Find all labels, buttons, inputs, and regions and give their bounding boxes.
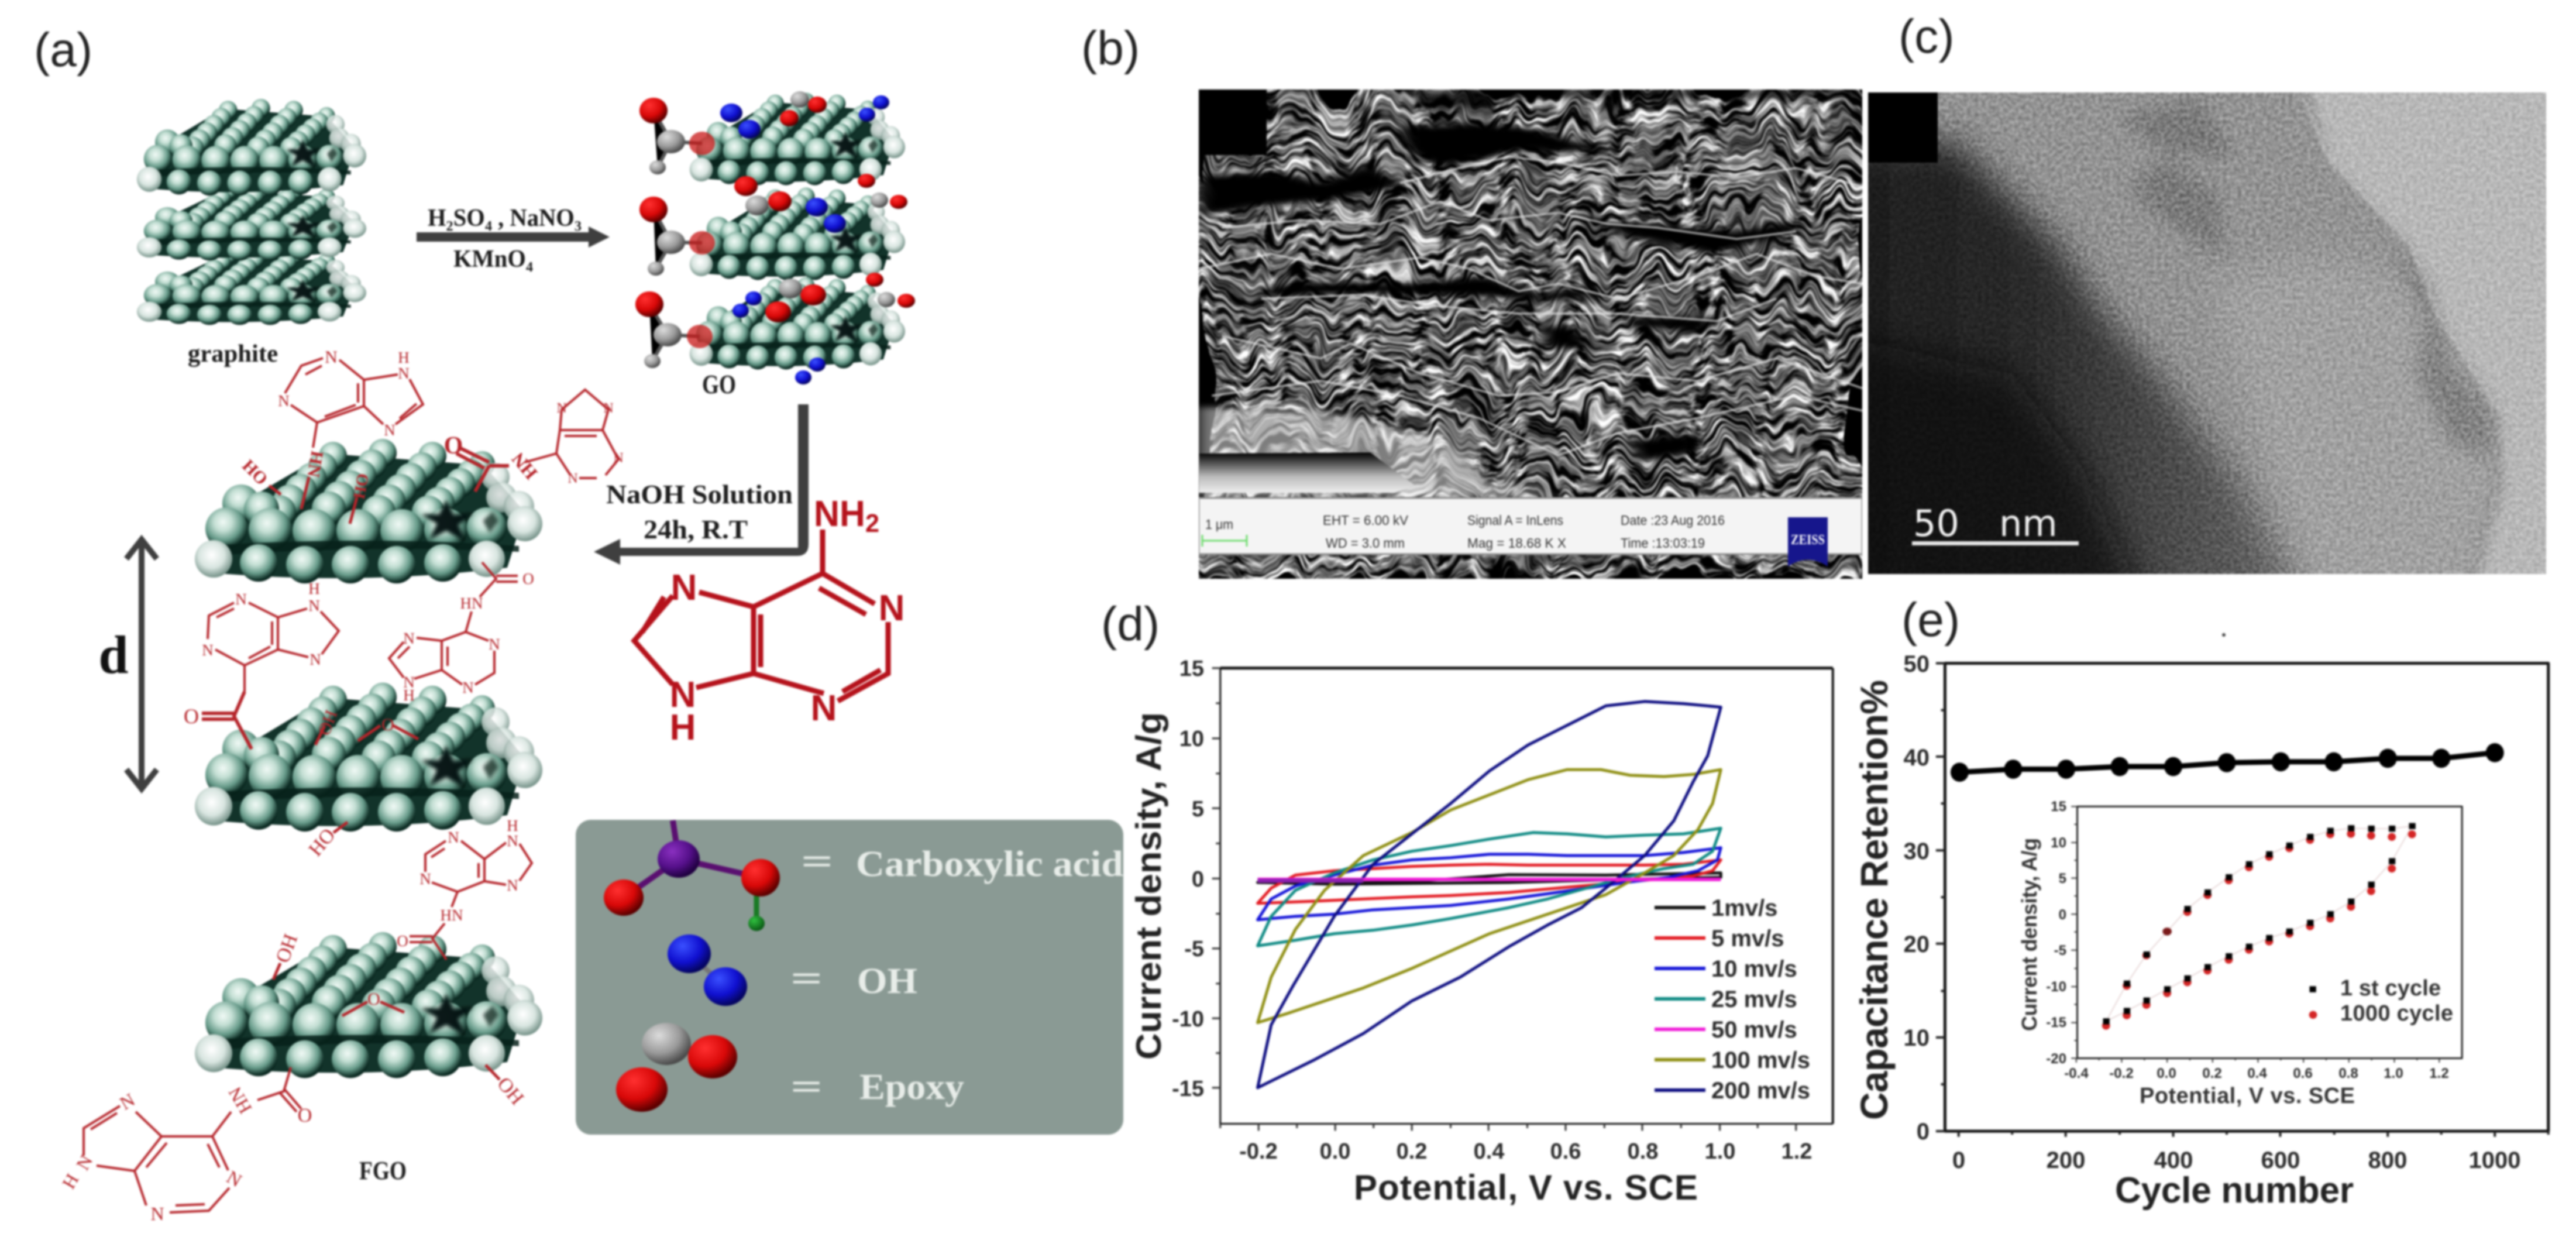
top adenine and functional groups: N <box>384 421 395 439</box>
OH ball-and-stick icon <box>668 935 747 1006</box>
time and temperature conditions: 24h, R.T <box>644 514 748 544</box>
SEM info bar: 1 μm <box>1205 517 1233 532</box>
x tick labels <box>1239 1139 1812 1164</box>
x tick labels: 1000 <box>2469 1148 2520 1173</box>
large adenine molecule: NH <box>814 494 866 534</box>
x tick labels: 200 <box>2047 1148 2085 1173</box>
x tick labels: 0.6 <box>1550 1139 1581 1164</box>
inset x tick labels: -0.2 <box>2109 1066 2134 1081</box>
inset y tick labels <box>2046 799 2066 1067</box>
x tick labels: -0.2 <box>1239 1139 1278 1164</box>
y tick labels: -10 <box>1172 1007 1204 1032</box>
large adenine molecule: N <box>879 588 904 628</box>
distance arrow d <box>126 540 157 789</box>
adenine bottom left: HN <box>224 1083 256 1118</box>
FGO top sheet <box>195 439 542 583</box>
y axis title: Capacitance Retention% <box>1852 680 1896 1120</box>
TEM scale label: 50 <box>1913 502 1959 545</box>
SEM info bar: WD = 3.0 mm <box>1326 535 1405 551</box>
panel c: TEM micrograph <box>1802 59 2546 620</box>
functional groups on middle sheet <box>305 707 418 860</box>
ZEISS logo: ZEISS <box>1791 532 1825 548</box>
SEM info bar: Time :13:03:19 <box>1621 535 1705 551</box>
OH label: OH <box>857 961 917 1001</box>
adenine left between top and middle sheet: N <box>309 651 321 668</box>
panel a: synthesis scheme <box>58 91 1123 1224</box>
y tick labels <box>1172 657 1204 1101</box>
TEM dark thick region <box>1802 140 2311 620</box>
TEM scale label: nm <box>1999 502 2058 545</box>
large adenine molecule <box>634 494 904 748</box>
adenine left between top and middle sheet <box>184 580 339 749</box>
adenine left between top and middle sheet: N <box>308 597 320 614</box>
adenine between middle and bottom sheet: N <box>507 877 518 894</box>
chart legend: 10 mv/s <box>1711 956 1797 982</box>
carboxylic acid equals sign: = <box>801 842 833 882</box>
functional groups on middle sheet: OH <box>315 707 341 738</box>
panel d: CV chart <box>1129 657 1833 1207</box>
panel label (e): (e) <box>1901 593 1960 647</box>
TEM fold shadows <box>2118 99 2492 456</box>
inset x tick labels: 0.0 <box>2157 1066 2176 1081</box>
inset x tick labels: 0.4 <box>2247 1066 2267 1081</box>
y tick labels: 10 <box>1179 727 1204 751</box>
CV curves <box>1258 702 1721 1088</box>
adenine bottom left: O <box>298 1105 312 1126</box>
inset x axis title: Potential, V vs. SCE <box>2140 1084 2355 1108</box>
FGO bottom sheet <box>195 932 542 1078</box>
x tick labels: 1.2 <box>1781 1139 1812 1164</box>
y tick labels: -15 <box>1172 1077 1204 1101</box>
x tick labels <box>1952 1148 2520 1173</box>
functional groups on bottom sheet: OH <box>493 1073 528 1109</box>
adenine between middle and bottom sheet: H <box>507 817 518 834</box>
y tick labels: 50 <box>1904 651 1930 677</box>
SEM info bar: Signal A = InLens <box>1467 513 1563 528</box>
top adenine and functional groups: N <box>398 365 410 382</box>
y tick labels: 0 <box>1192 867 1204 892</box>
large adenine molecule: N <box>670 675 696 715</box>
y tick labels: 30 <box>1904 839 1930 864</box>
top adenine and functional groups: N <box>568 471 578 486</box>
top adenine and functional groups: N <box>603 401 614 416</box>
functional groups on bottom sheet: OH <box>272 931 302 966</box>
top adenine and functional groups: H <box>398 349 410 366</box>
TEM lighter lower band <box>2212 257 2498 620</box>
legend panel <box>576 820 1123 1135</box>
adenine between middle and bottom sheet: HN <box>440 906 463 924</box>
y tick labels <box>1904 651 1930 1145</box>
top adenine and functional groups: N <box>613 451 624 466</box>
top adenine and functional groups: OH <box>349 472 372 500</box>
ZEISS logo <box>1788 517 1828 566</box>
adenine between middle and bottom sheet: N <box>419 870 431 888</box>
x tick labels: 0.0 <box>1320 1139 1350 1164</box>
y tick labels: 20 <box>1904 932 1930 957</box>
label GO: GO <box>702 369 736 399</box>
functional groups on bottom sheet: O <box>367 990 380 1009</box>
graphite stack <box>137 99 366 325</box>
chart legend: 5 mv/s <box>1711 926 1784 951</box>
chart legend: 100 mv/s <box>1711 1047 1810 1073</box>
adenine bottom left: H <box>58 1170 82 1193</box>
adenine bottom left: N <box>116 1089 139 1114</box>
adenine left between top and middle sheet: H <box>308 580 320 597</box>
large adenine molecule: N <box>671 568 697 608</box>
adenine left between top and middle sheet: N <box>235 590 247 608</box>
x tick labels: 800 <box>2368 1148 2407 1173</box>
reaction arrow: oxidation <box>417 226 610 248</box>
carboxylic acid ball-and-stick icon <box>604 820 780 931</box>
chart legend: 200 mv/s <box>1711 1078 1810 1104</box>
large adenine molecule: H <box>670 707 696 748</box>
SEM info bar <box>1199 498 1862 554</box>
inset axes and ticks <box>2071 806 2462 1063</box>
linker amide between top and middle sheet with adenine right: O <box>522 570 534 588</box>
inset y tick labels: -20 <box>2046 1051 2066 1067</box>
linker amide between top and middle sheet with adenine right <box>389 562 534 704</box>
label d: d <box>98 625 129 685</box>
TEM grain noise <box>1868 92 2546 574</box>
reagents above arrow: H₂SO₄ , NaNO₃ <box>428 205 582 232</box>
GO stack <box>635 91 915 384</box>
TEM darkest core <box>1802 328 2153 620</box>
inset chart <box>2017 799 2462 1108</box>
x tick labels: 0.4 <box>1474 1139 1504 1164</box>
large adenine molecule: N <box>811 688 837 729</box>
inset y tick labels: 5 <box>2059 871 2066 887</box>
SEM info bar: EHT = 6.00 kV <box>1323 513 1409 528</box>
retention data series <box>1951 743 2504 782</box>
SEM redaction block <box>1199 90 1267 155</box>
inset y tick labels: 0 <box>2059 907 2066 923</box>
panel e: capacitance retention chart <box>1852 651 2549 1211</box>
chart legend <box>1655 895 1810 1104</box>
chart legend: 25 mv/s <box>1711 987 1797 1012</box>
inset x tick labels <box>2064 1066 2449 1081</box>
linker amide between top and middle sheet with adenine right: N <box>489 635 500 653</box>
linker amide between top and middle sheet with adenine right: N <box>403 674 415 691</box>
linker amide between top and middle sheet with adenine right: N <box>462 679 474 696</box>
top adenine and functional groups: HO <box>238 456 271 489</box>
SEM lamellar texture <box>1199 90 1862 579</box>
reagent below arrow: KMnO₄ <box>453 246 533 273</box>
SEM dark crevices and ridges <box>1199 90 1862 497</box>
TEM scale bar <box>1912 541 2079 545</box>
panel label (a): (a) <box>34 23 92 77</box>
chart legend: 50 mv/s <box>1711 1017 1797 1043</box>
inset y tick labels: -15 <box>2046 1015 2066 1030</box>
x tick labels: 1.0 <box>1705 1139 1735 1164</box>
y tick labels: 40 <box>1904 745 1930 771</box>
x axis title: Potential, V vs. SCE <box>1354 1168 1698 1207</box>
y tick labels: -5 <box>1184 937 1204 961</box>
top adenine and functional groups: O <box>444 432 463 459</box>
inset x tick labels: 1.0 <box>2384 1066 2403 1081</box>
adenine between middle and bottom sheet: N <box>507 832 518 850</box>
inset x tick labels: -0.4 <box>2064 1066 2089 1081</box>
inset data points <box>2102 823 2416 1030</box>
linker amide between top and middle sheet with adenine right: HN <box>460 595 483 612</box>
functionalization arrow <box>594 404 809 565</box>
inset x tick labels: 1.2 <box>2429 1066 2449 1081</box>
inset x tick labels: 0.2 <box>2202 1066 2222 1081</box>
axes frame and ticks <box>1936 664 2549 1137</box>
adenine between middle and bottom sheet: N <box>448 829 459 846</box>
inset legend text 1000 cycle: 1000 cycle <box>2340 1001 2453 1026</box>
y tick labels: 10 <box>1904 1025 1930 1051</box>
top adenine and functional groups: N <box>278 392 290 410</box>
y axis title: Current density, A/g <box>1129 712 1168 1060</box>
top adenine and functional groups: HN <box>303 449 327 479</box>
adenine between middle and bottom sheet <box>397 817 532 960</box>
top adenine and functional groups <box>238 348 624 524</box>
SEM info bar: Mag = 18.68 K X <box>1467 535 1566 551</box>
top adenine and functional groups: N <box>325 348 338 367</box>
axes frame and ticks <box>1212 668 1833 1131</box>
inset y tick labels: 15 <box>2051 799 2066 815</box>
inset x tick labels: 0.6 <box>2293 1066 2313 1081</box>
OH equals sign: = <box>790 959 823 999</box>
label FGO: FGO <box>359 1156 407 1185</box>
adenine left between top and middle sheet: O <box>184 705 199 728</box>
panel label (d): (d) <box>1101 597 1160 651</box>
x tick labels: 600 <box>2261 1148 2300 1173</box>
chart legend: 1mv/s <box>1711 895 1777 921</box>
x tick labels: 400 <box>2154 1148 2193 1173</box>
adenine bottom left: N <box>72 1151 97 1174</box>
SEM info bar: Date :23 Aug 2016 <box>1621 513 1725 528</box>
adenine bottom left: N <box>150 1203 164 1224</box>
epoxy label: Epoxy <box>859 1067 964 1107</box>
stray speck <box>2222 633 2226 637</box>
inset y tick labels: -10 <box>2046 979 2066 995</box>
linker amide between top and middle sheet with adenine right: H <box>403 686 415 704</box>
x axis title: Cycle number <box>2115 1170 2354 1211</box>
linker amide between top and middle sheet with adenine right: N <box>403 630 415 647</box>
TEM flake body <box>1814 59 2504 614</box>
inset y tick labels: -5 <box>2054 943 2066 958</box>
FGO middle sheet <box>195 683 542 832</box>
adenine bottom left <box>58 1067 312 1224</box>
y tick labels: 0 <box>1917 1119 1930 1145</box>
epoxy equals sign: = <box>790 1067 823 1107</box>
x tick labels: 0.2 <box>1397 1139 1427 1164</box>
panel label (b): (b) <box>1081 22 1140 75</box>
inset y axis title: Current density, A/g <box>2017 838 2041 1031</box>
y tick labels: 15 <box>1179 657 1204 681</box>
TEM redaction block <box>1868 91 1938 163</box>
carboxylic acid label: Carboxylic acid <box>856 844 1123 884</box>
functional groups on bottom sheet <box>272 931 528 1109</box>
x tick labels: 0.8 <box>1628 1139 1658 1164</box>
inset legend text first cycle: 1 st cycle <box>2340 976 2441 1001</box>
functional groups on middle sheet: HO <box>305 824 340 860</box>
label graphite: graphite <box>188 341 278 367</box>
y tick labels: 5 <box>1192 797 1204 822</box>
inset x tick labels: 0.8 <box>2338 1066 2358 1081</box>
panel b: SEM micrograph <box>1199 90 1862 579</box>
adenine bottom left: N <box>223 1166 246 1191</box>
x tick labels: 0 <box>1952 1148 1965 1173</box>
functional groups on middle sheet: O <box>381 715 394 734</box>
adenine left between top and middle sheet: N <box>202 641 214 659</box>
epoxy ball-and-stick icon <box>616 1023 737 1112</box>
large adenine molecule: 2 <box>865 509 879 538</box>
panel label (c): (c) <box>1899 10 1955 63</box>
NaOH conditions: NaOH Solution <box>606 479 793 509</box>
top adenine and functional groups: HN <box>507 449 541 484</box>
inset y tick labels: 10 <box>2051 835 2066 851</box>
top adenine and functional groups: N <box>556 401 567 416</box>
adenine between middle and bottom sheet: O <box>397 932 408 950</box>
